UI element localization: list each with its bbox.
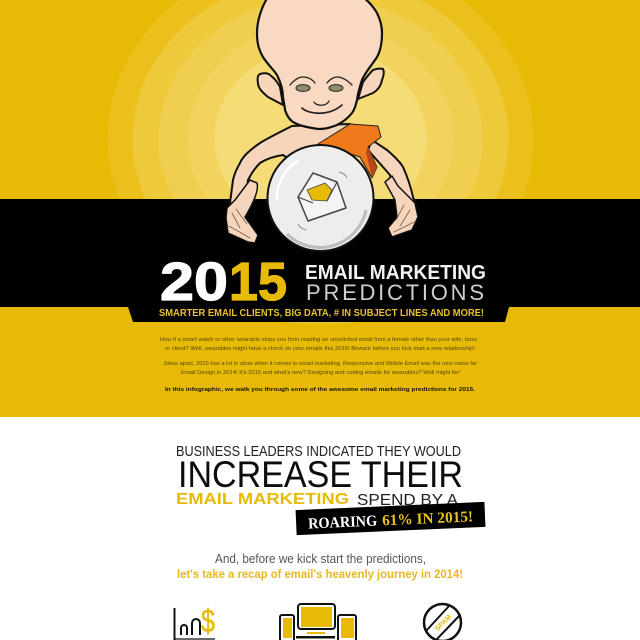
panel: yellow header background: [0, 0, 640, 417]
text: recap line 1: And, before we kick start the predictions,: [215, 552, 426, 566]
dollar sign: $: [201, 603, 215, 639]
line 2: INCREASE THEIR: [178, 453, 463, 495]
heading: 2015: [160, 252, 287, 312]
intro text: How if a smart watch or other wearable stops you from reading an unsolicited email from a female other than your wife, boss: [160, 337, 477, 343]
line 3 continued: SPEND BY A: [357, 492, 459, 509]
text: recap line 2: let's take a recap of email's heavenly journey in 2014!: [177, 569, 463, 581]
icon: no spam: [424, 604, 461, 640]
intro text: [160, 337, 477, 393]
icon: revenue chart: [174, 603, 215, 640]
panel: black banner: [0, 199, 640, 322]
panel: 61 percent statistic: [176, 444, 485, 535]
callout: roaring 61%: ROARING: [308, 513, 377, 533]
crystal ball: [268, 145, 374, 251]
heading: 2015: 15: [229, 252, 287, 312]
line 3: EMAIL MARKETING: [176, 491, 349, 508]
heading: 2015: 20: [160, 252, 228, 312]
icon: devices: [280, 604, 356, 640]
callout: roaring 61%: [296, 502, 485, 535]
wave lines: [298, 172, 347, 230]
intro text: or client? Well, wearables might have a check on your emails this 2015! Beware before you kick start a new relationship!: [165, 346, 475, 352]
subheading: SMARTER EMAIL CLIENTS, BIG DATA, # IN SUBJECT LINES AND MORE!: [159, 307, 484, 319]
intro text: Jokes apart, 2015 has a lot in store when it comes to email marketing. Responsive and Mobile Email was the new name for: [163, 361, 477, 367]
face: [290, 77, 352, 113]
callout: roaring 61%: 61% IN 2015!: [382, 508, 473, 529]
arms and torso: [230, 124, 416, 213]
intro text: In this infographic, we walk you through some of the awesome email marketing predictions for 2015.: [165, 387, 475, 393]
heading: predictions: PREDICTIONS: [306, 280, 484, 305]
ears: [258, 69, 384, 105]
icon: envelope: [298, 173, 346, 221]
left hand: [226, 180, 258, 243]
line 1: BUSINESS LEADERS INDICATED THEY WOULD: [176, 444, 461, 460]
head: [257, 0, 382, 129]
right hand: [385, 176, 418, 237]
heading: email marketing: EMAIL MARKETING: [305, 261, 486, 284]
intro text: Email Design in 2014! It's 2015 and what's new? Designing and coding emails for wearables? Well might be!: [181, 370, 460, 376]
illustration: monk with crystal ball: [226, 0, 418, 251]
icon: no spam: SPAM: [434, 614, 453, 633]
robe: [318, 124, 381, 178]
